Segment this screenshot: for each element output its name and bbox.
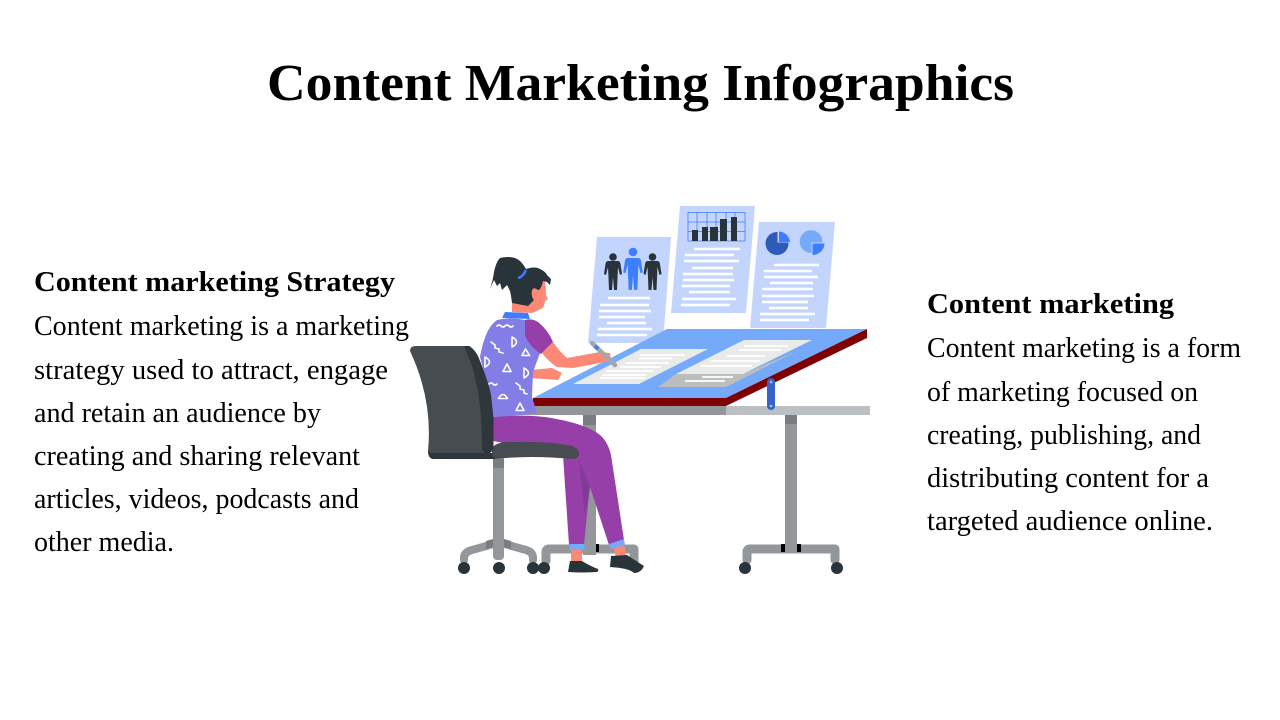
right text block: content marketing (927, 289, 1241, 537)
right body text: Content marketing is a form (927, 333, 1241, 364)
icon: pie charts (766, 230, 826, 256)
sleeve (525, 319, 553, 354)
right body text (927, 333, 1241, 537)
papers on desk (573, 340, 812, 387)
office chair (410, 346, 539, 574)
shoes (568, 561, 598, 572)
far leg (563, 440, 596, 545)
pen (592, 343, 615, 365)
left text block: content marketing strategy (34, 267, 409, 558)
illustration: woman working at drafting desk (410, 206, 870, 574)
ankles and cuffs (570, 539, 626, 562)
arm (542, 342, 611, 368)
right body text: creating, publishing, and (927, 420, 1201, 451)
left body text: strategy used to attract, engage (34, 355, 388, 386)
far hand (530, 368, 562, 380)
right body text: distributing content for a (927, 463, 1210, 494)
collar (502, 312, 530, 319)
chair back strip (464, 346, 494, 454)
desk (500, 329, 870, 574)
seat cushion (492, 442, 579, 459)
floating sheet: people (588, 237, 671, 343)
left heading: Content marketing Strategy (34, 267, 395, 298)
right heading: Content marketing (927, 289, 1174, 320)
torso shirt (480, 318, 540, 417)
bar chart (688, 212, 745, 241)
left body text: other media. (34, 527, 174, 558)
right body text: targeted audience online. (927, 506, 1213, 537)
woman (464, 257, 644, 573)
left body text (34, 311, 409, 558)
floating sheet: bar chart (671, 206, 755, 313)
chair post and base (458, 455, 539, 574)
neck and face (512, 303, 532, 313)
title: Content Marketing Infographics (267, 55, 1014, 112)
floating sheet: pie charts (750, 222, 835, 328)
desk hinge (767, 378, 775, 410)
ear (532, 288, 537, 298)
tilted desk top (533, 329, 867, 398)
desk legs (538, 415, 843, 574)
near leg (493, 416, 624, 545)
right body text: of marketing focused on (927, 377, 1198, 408)
left body text: creating and sharing relevant (34, 441, 360, 472)
left body text: and retain an audience by (34, 398, 321, 429)
hair tie (518, 270, 526, 278)
chair back (410, 346, 490, 459)
left body text: articles, videos, podcasts and (34, 484, 359, 515)
desk board (726, 406, 870, 415)
hair (490, 257, 551, 306)
left body text: Content marketing is a marketing (34, 311, 409, 342)
shirt pattern (485, 325, 530, 410)
icon: people (604, 248, 662, 290)
